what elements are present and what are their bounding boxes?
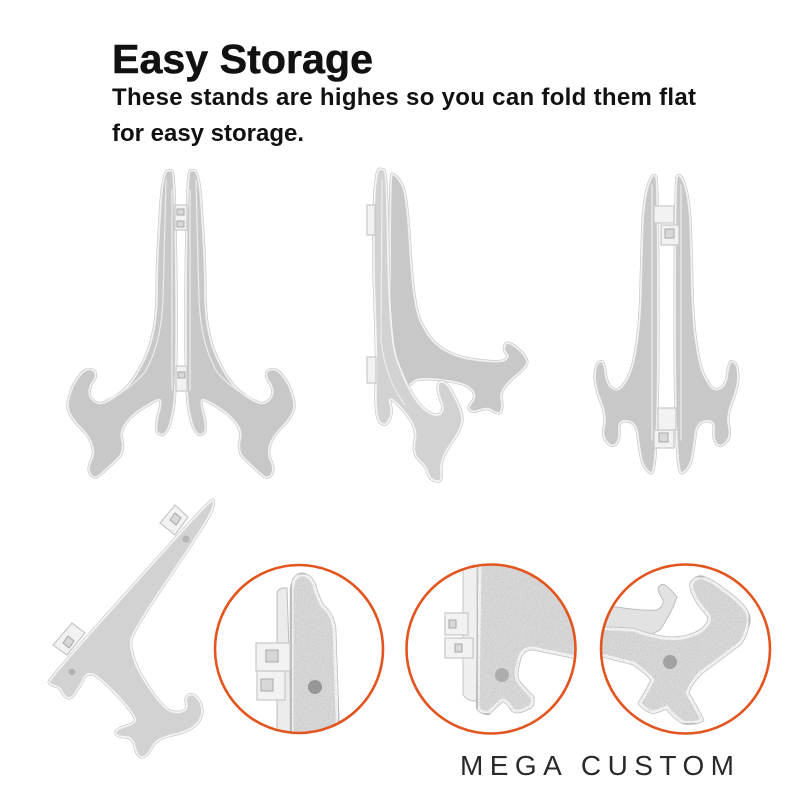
- subtitle text: These stands are highes so you can fold them flat: [112, 84, 696, 111]
- upper clip: [160, 505, 188, 535]
- stand: angled view: [367, 169, 527, 481]
- hinge: [367, 205, 375, 235]
- rear hook: [606, 584, 678, 634]
- rear leg: [374, 169, 462, 481]
- upper pin dot: [182, 536, 190, 542]
- stand: front view: [68, 170, 294, 477]
- detail circle: top edge: [215, 565, 383, 740]
- front leg: [390, 174, 527, 413]
- subtitle text: for easy storage.: [112, 120, 304, 147]
- lower hinge: [176, 366, 187, 391]
- upper hinge: [175, 205, 187, 230]
- stand: rear view: [595, 175, 738, 473]
- rear strip: [463, 560, 477, 701]
- upper hinge: [654, 206, 679, 245]
- subtitle text: [112, 84, 696, 147]
- pin dot: [495, 668, 509, 682]
- textured panel: [476, 566, 574, 716]
- orange ring: [406, 564, 576, 734]
- left half: [595, 175, 658, 473]
- hinge: [256, 643, 290, 700]
- title: Easy Storage: [112, 36, 373, 82]
- right half: [186, 170, 294, 477]
- rear strip: [276, 587, 290, 731]
- orange ring: [215, 565, 383, 733]
- hinge: [445, 613, 473, 658]
- lower pin dot: [68, 668, 76, 676]
- detail circle: foot: [406, 560, 590, 734]
- brand name: MEGA CUSTOM: [460, 750, 734, 781]
- textured panel: [292, 575, 338, 740]
- right half: [675, 175, 738, 473]
- lower clip: [53, 623, 85, 655]
- detail circle: hook: [590, 564, 770, 734]
- stand: folded flat: [49, 500, 214, 757]
- body: [49, 500, 214, 757]
- left half: [68, 170, 176, 477]
- pin dot: [308, 680, 322, 694]
- lower hinge: [367, 357, 376, 383]
- pin dot: [663, 655, 677, 669]
- lower hinge: [654, 408, 676, 448]
- orange ring: [601, 564, 770, 734]
- textured panel: [590, 578, 748, 723]
